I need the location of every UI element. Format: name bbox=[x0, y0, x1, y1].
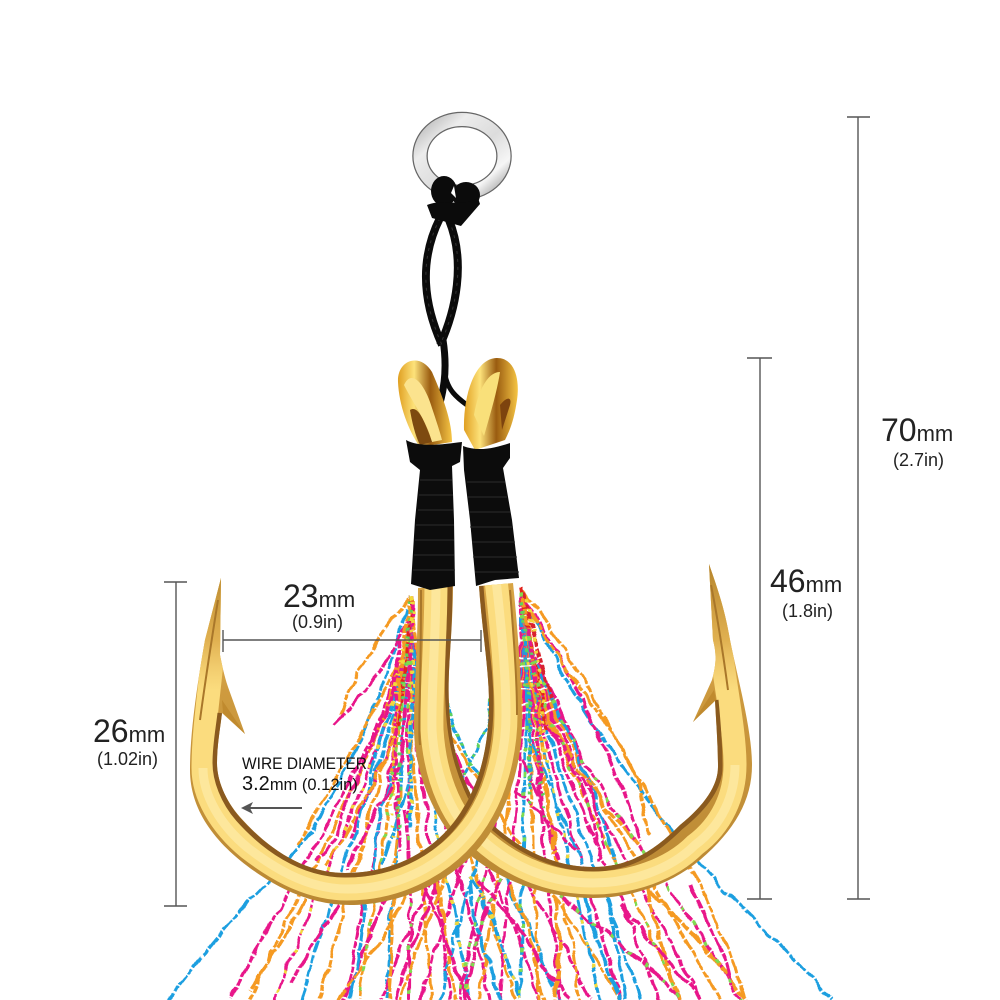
strands: centre crossing bbox=[447, 690, 490, 812]
label: 23mm: (0.9in) bbox=[292, 612, 343, 632]
strands: dense left bundle bbox=[392, 595, 414, 850]
metal ring bbox=[420, 120, 504, 192]
label: 26mm: (1.02in) bbox=[97, 749, 158, 769]
strands: glitter flecks bottom bbox=[275, 595, 740, 1000]
dimension line: 70mm bbox=[847, 117, 870, 899]
strands: left fan bbox=[297, 597, 412, 870]
strands: lower lattice bbox=[250, 875, 745, 1000]
label: wire diameter: WIRE DIAMETER bbox=[242, 755, 367, 773]
left hook bbox=[185, 570, 522, 905]
label: wire diameter bbox=[242, 755, 367, 795]
dimension line: 46mm bbox=[747, 358, 772, 899]
lower cord and loop ends bbox=[440, 340, 467, 405]
dimension line: 26mm bbox=[164, 582, 187, 906]
cord loop and knot bbox=[426, 176, 480, 345]
label: 46mm bbox=[770, 563, 842, 621]
arrow: wire diameter bbox=[241, 802, 302, 814]
dimension line: 23mm bbox=[223, 630, 481, 652]
thread wrap: right bbox=[463, 443, 519, 586]
label: 23mm: 23mm bbox=[283, 578, 355, 614]
right hook bbox=[414, 560, 760, 898]
label: 70mm bbox=[881, 412, 953, 470]
label: 70mm: (2.7in) bbox=[893, 450, 944, 470]
strands: back layer bbox=[168, 595, 830, 1000]
label: 46mm: 46mm bbox=[770, 563, 842, 599]
label: wire diameter: 3.2mm (0.12in) bbox=[242, 773, 358, 795]
label: 26mm: 26mm bbox=[93, 713, 165, 749]
strands: right fan bbox=[515, 592, 745, 1000]
gold eye: right bbox=[464, 358, 518, 450]
label: 70mm: 70mm bbox=[881, 412, 953, 448]
thread wrap: left bbox=[406, 440, 462, 590]
label: 23mm bbox=[283, 578, 355, 632]
gold eye: left bbox=[398, 361, 452, 447]
tinsel strands bbox=[168, 590, 830, 1000]
strands: dense right bundle bbox=[522, 590, 552, 820]
label: 46mm: (1.8in) bbox=[782, 601, 833, 621]
label: 26mm bbox=[93, 713, 165, 769]
